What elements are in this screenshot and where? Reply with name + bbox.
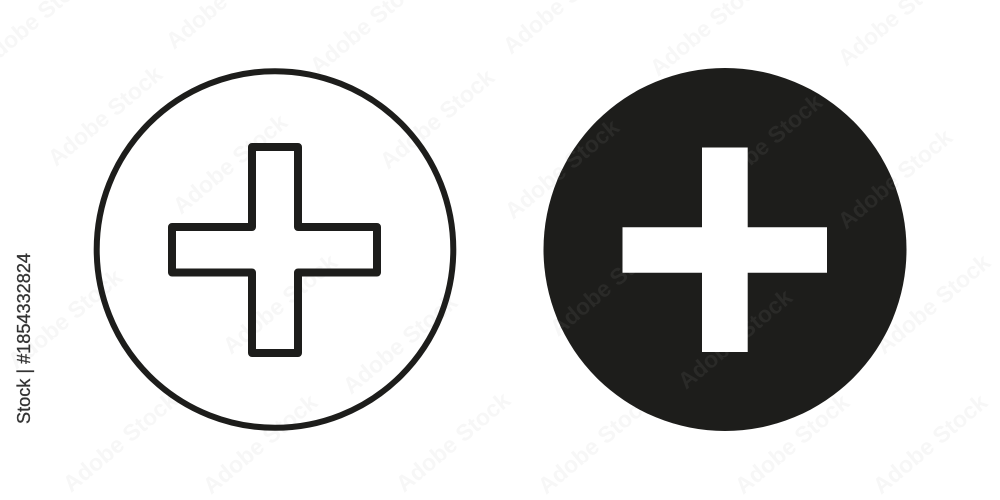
white plus (622, 148, 827, 352)
outline circle (97, 71, 453, 428)
watermarks on background: Adobe Stock (168, 109, 292, 219)
icon: outlined circle with plus (97, 71, 453, 428)
watermarks on filled circle: Adobe Stock (500, 114, 624, 224)
watermarks on background: Adobe Stock (533, 389, 657, 499)
watermarks on background: Adobe Stock (198, 389, 322, 499)
icon: filled circle with plus (544, 68, 906, 431)
filled circle (544, 68, 906, 431)
watermarks on background: Adobe Stock (58, 387, 182, 497)
watermarks on background: Adobe Stock (391, 387, 515, 497)
watermarks on background: Adobe Stock (375, 64, 499, 174)
watermarks on background: Adobe Stock (730, 389, 854, 499)
watermarks on filled circle (557, 96, 896, 390)
watermarks on filled circle: Adobe Stock (673, 284, 797, 394)
watermarks on background: Adobe Stock (218, 249, 342, 359)
stock id side text: Stock | #1854332824 (14, 253, 34, 424)
watermarks on background: Adobe Stock (500, 114, 624, 224)
infographic canvas (16, 68, 906, 431)
watermarks on background: Adobe Stock (868, 389, 992, 499)
watermarks on background: Adobe Stock (833, 124, 957, 234)
watermarks on background: Adobe Stock (3, 264, 127, 374)
watermarks on background: Adobe Stock (43, 61, 167, 171)
watermarks on background: Adobe Stock (545, 231, 669, 341)
watermarks on background: Adobe Stock (871, 249, 995, 359)
watermarks on background: Adobe Stock (338, 289, 462, 399)
watermarks on filled circle: Adobe Stock (833, 124, 957, 234)
outline plus (172, 147, 377, 353)
watermarks on filled circle: Adobe Stock (545, 231, 669, 341)
watermarks on filled circle: Adobe Stock (703, 89, 827, 199)
